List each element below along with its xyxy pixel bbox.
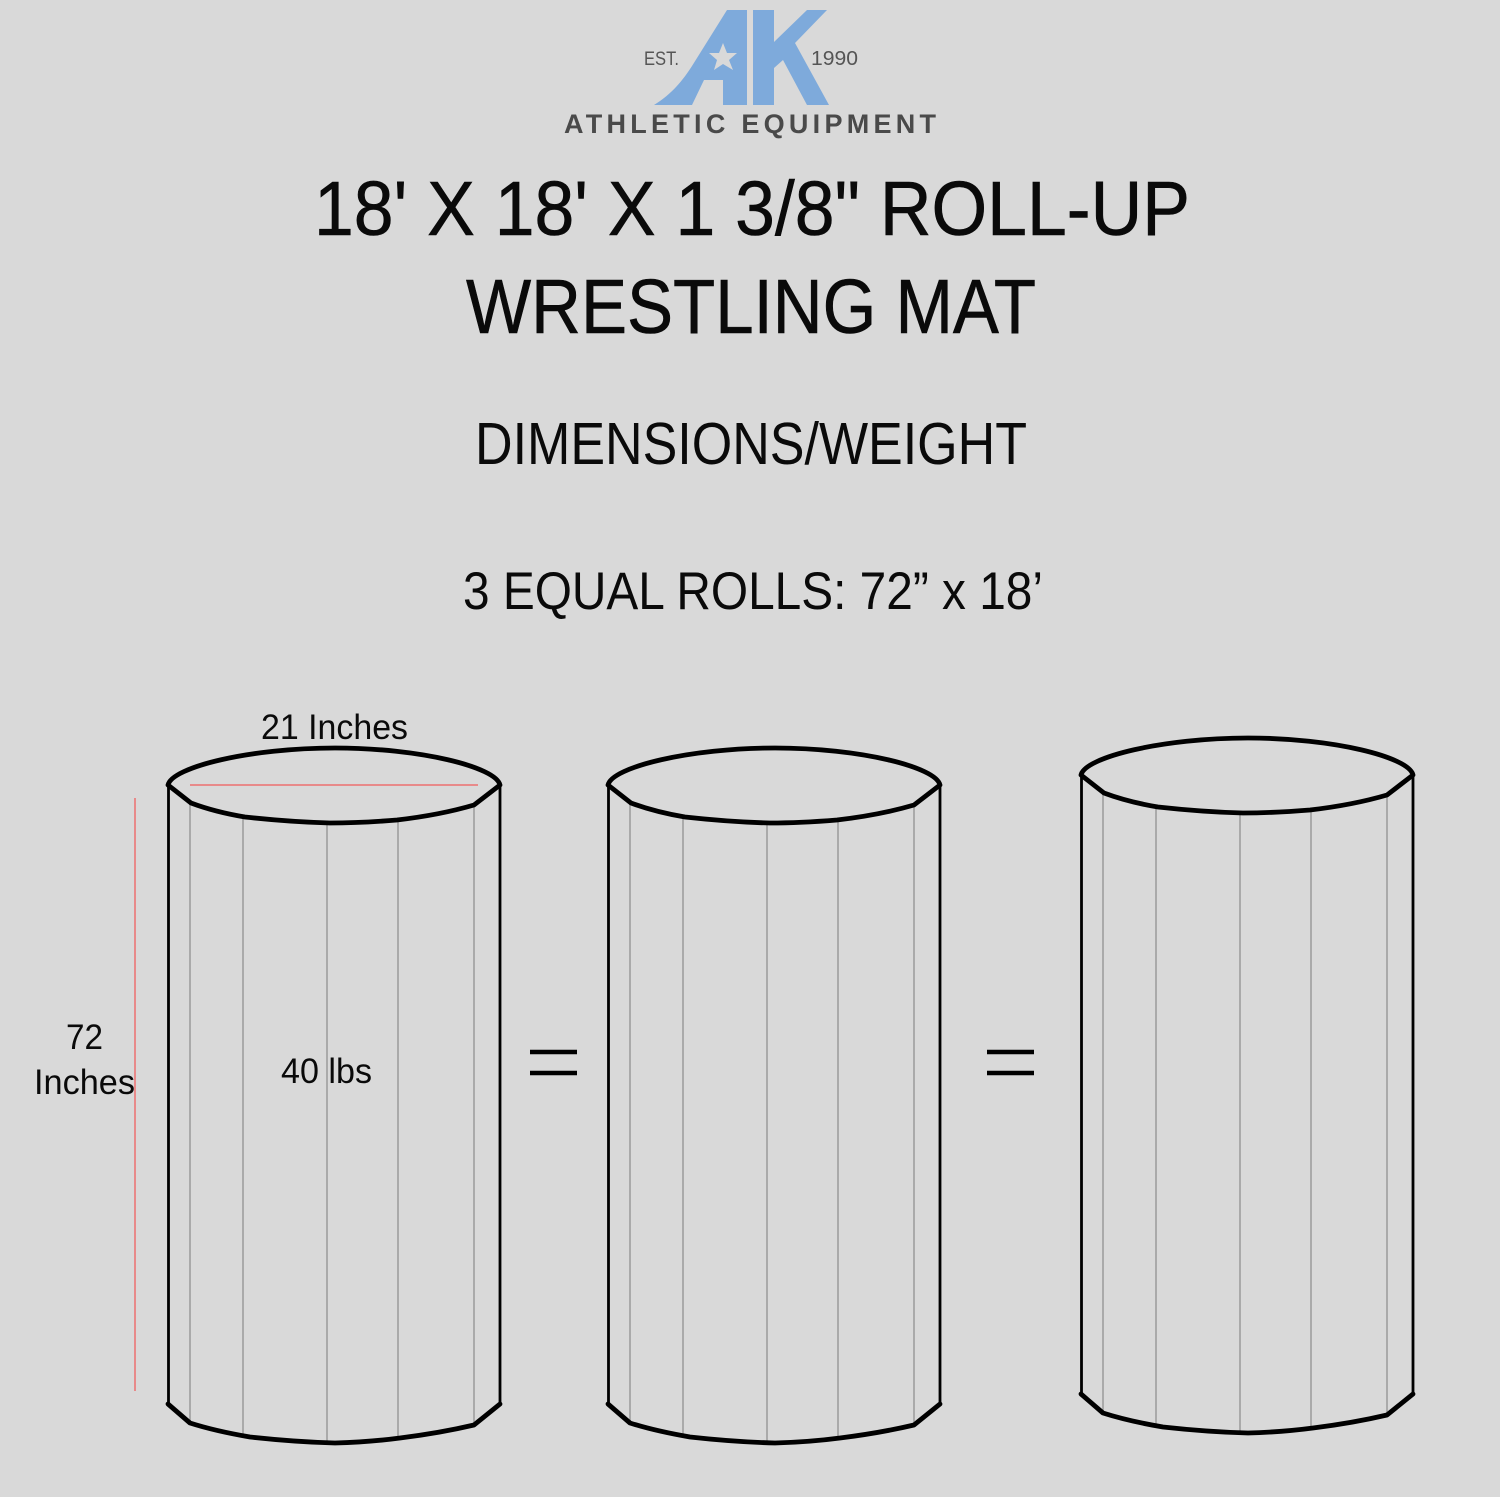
logo company name: ATHLETIC EQUIPMENT	[564, 109, 936, 139]
height label: 72	[66, 1018, 103, 1057]
height measurement line	[134, 798, 136, 1391]
width label: 21 Inches	[261, 708, 408, 747]
roll 2	[608, 748, 940, 1443]
title: WRESTLING MAT	[466, 264, 1036, 350]
height label	[34, 1018, 135, 1102]
roll 3	[1081, 738, 1413, 1433]
logo: AK Athletic Equipment	[564, 10, 936, 139]
width measurement line	[190, 784, 478, 786]
logo letter A	[654, 10, 747, 105]
equals sign 1	[530, 1052, 577, 1073]
title: 18' X 18' X 1 3/8" ROLL-UP	[314, 166, 1190, 252]
subtitle: dimensions/weight: DIMENSIONS/WEIGHT	[475, 411, 1027, 477]
logo est. text: EST.	[644, 49, 679, 70]
weight label: 40 lbs	[281, 1052, 372, 1091]
height label: Inches	[34, 1063, 135, 1102]
logo year text: 1990	[811, 48, 858, 70]
equals sign 2	[987, 1052, 1034, 1073]
subtitle: 3 equal rolls: 3 EQUAL ROLLS: 72” x 18’	[463, 562, 1043, 621]
logo star	[709, 43, 737, 70]
roll 1	[168, 748, 500, 1443]
logo letter K	[753, 10, 829, 105]
title	[314, 166, 1190, 350]
